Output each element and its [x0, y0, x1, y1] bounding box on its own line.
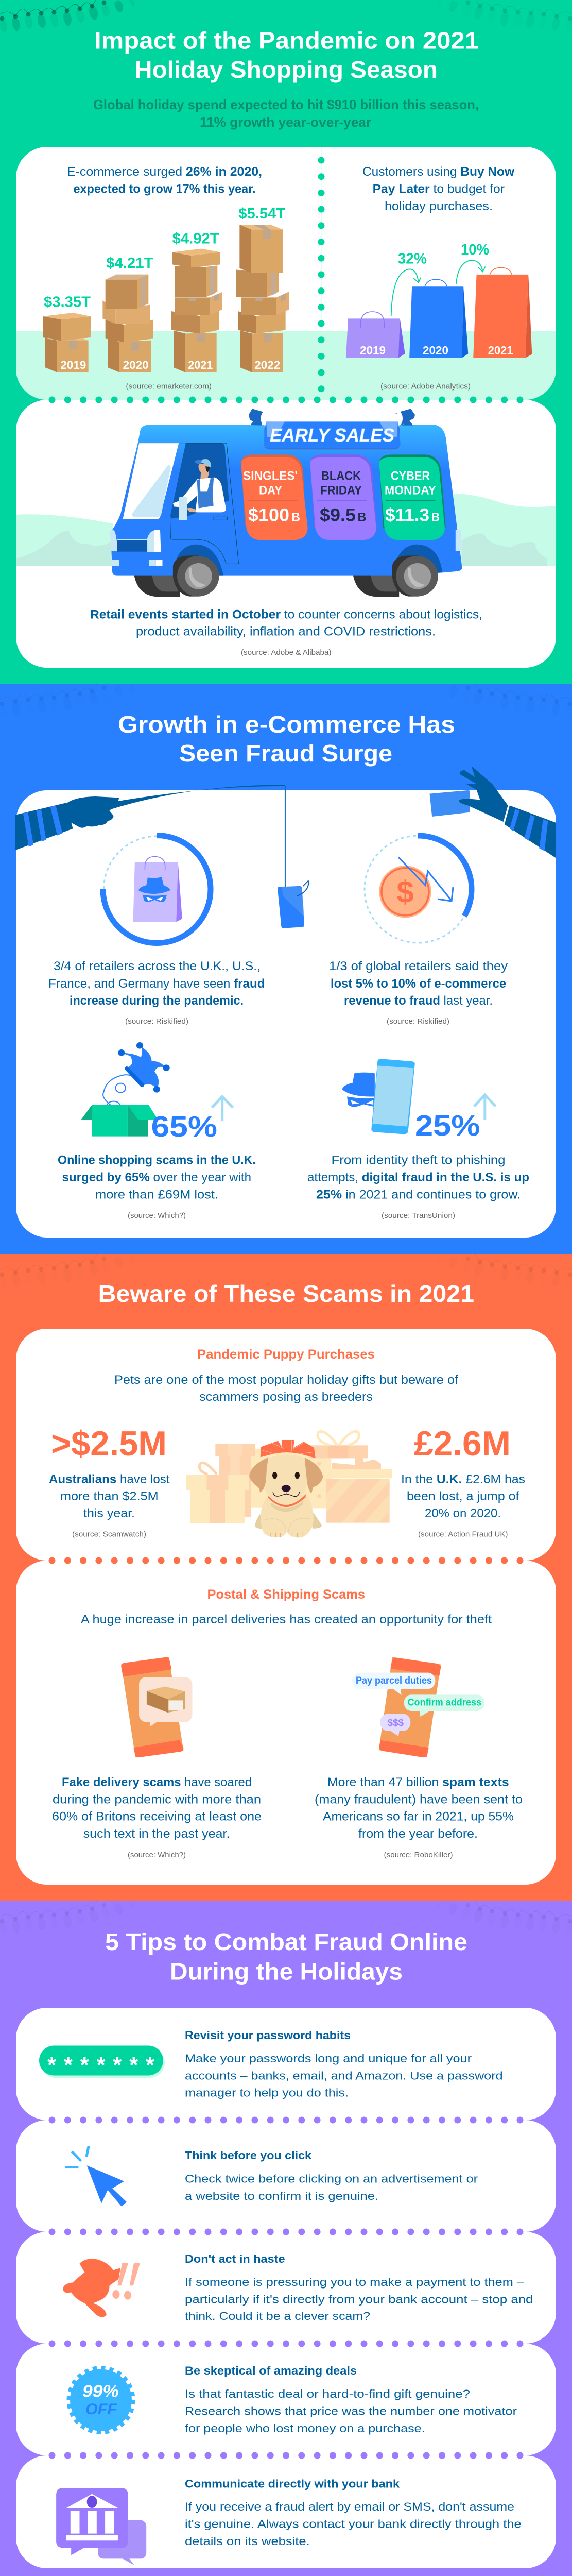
icon: running figure with exclamation marks [63, 2259, 140, 2317]
section background: blue [0, 684, 572, 1254]
text: buy now pay later: Customers using Buy Now [362, 165, 514, 179]
text: australians: Australians have lost [49, 1472, 170, 1486]
text: one third of retailers: revenue to fraud last year. [344, 994, 493, 1008]
text: uk: In the U.K. £2.6M has [401, 1472, 525, 1486]
tip text: think. Could it be a clever scam? [185, 2310, 370, 2323]
source: which: (source: Which?) [128, 1211, 186, 1220]
panel: fraud surge [15, 766, 556, 1238]
front wheel [173, 555, 219, 597]
heading: five tips: During the Holidays [170, 1958, 403, 1985]
values: box stack labels [44, 206, 286, 371]
icon: cursor [65, 2146, 127, 2207]
chart: stacked boxes per year [43, 225, 289, 372]
tip text: a website to confirm it is genuine. [185, 2190, 378, 2202]
tip text: Think before you click [185, 2149, 312, 2162]
subtitle: global holiday spend [93, 97, 479, 130]
text: online shopping scams: surged by 65% over the year with [62, 1171, 251, 1184]
value: 25 percent: 25% [415, 1109, 480, 1142]
value: uk loss: £2.6M [414, 1424, 511, 1463]
panel: tip 4 amazing deals [16, 2344, 556, 2455]
text: spam bubbles: $$$ [387, 1718, 404, 1728]
text: e-commerce surged: E-commerce surged 26% in 2020, [67, 165, 262, 179]
text: one third of retailers: 1/3 of global retailers said they [329, 959, 508, 973]
values: bag labels: 10% [461, 242, 489, 258]
source: riskified: (source: Riskified) [125, 1017, 188, 1026]
source: transunion: (source: TransUnion) [382, 1211, 455, 1220]
text: van sign and prices: $11.3 [385, 505, 429, 526]
panel: pandemic puppy purchases [16, 1329, 556, 1561]
section background: green [0, 0, 572, 684]
source: robokiller: (source: RoboKiller) [384, 1851, 453, 1859]
tip text: Be skeptical of amazing deals [185, 2364, 357, 2377]
2020 boxes [102, 275, 153, 372]
text: three quarters of retailers [48, 959, 265, 1008]
icon: falling coin [379, 857, 453, 918]
text: australians [49, 1472, 170, 1520]
tip text: for people who lost money on a purchase. [185, 2422, 425, 2435]
panel: tip 5 communicate with bank [16, 2455, 556, 2568]
text: van sign and prices: FRIDAY [320, 483, 362, 497]
phishing phone [278, 880, 308, 928]
source: emarketer: (source: emarketer.com) [126, 382, 212, 391]
text: uk [401, 1472, 525, 1520]
text: van sign and prices: B [357, 511, 367, 524]
icon: bank speech bubbles [56, 2488, 146, 2565]
text: van sign and prices: MONDAY [385, 483, 436, 497]
values: box stack labels: $3.35T [44, 294, 91, 311]
text: spam texts: Americans so far in 2021, up 55% [323, 1810, 514, 1824]
text: retail events: product availability, inflation and COVID restrictions. [136, 625, 436, 639]
text: van sign and prices [243, 425, 440, 526]
heading: growth in e-commerce [118, 711, 455, 767]
source: which: (source: Which?) [128, 1851, 186, 1859]
source: riskified: (source: Riskified) [387, 1017, 449, 1026]
values: box stack labels: $4.92T [172, 230, 219, 247]
text: australians: more than $2.5M [60, 1489, 159, 1503]
tip text [185, 2149, 478, 2202]
values: box stack labels: 2022 [254, 359, 280, 371]
tip text: Check twice before clicking on an advertisement or [185, 2172, 478, 2185]
panel: tip 3 do not act in haste [16, 2232, 556, 2344]
values: bag labels: 32% [397, 250, 427, 267]
2022 boxes [236, 225, 289, 372]
heading: five tips [105, 1928, 467, 1985]
tip text: If you receive a fraud alert by email or SMS, don't assume [185, 2500, 514, 2513]
values: box stack labels: 2020 [123, 359, 149, 371]
subtitle: global holiday spend: Global holiday spend expected to hit $910 billion this season, [93, 97, 479, 112]
icon: delivery van [110, 409, 462, 597]
rear wheel [392, 555, 438, 597]
text: van sign and prices: $9.5 [320, 505, 356, 526]
icon: phone with parcel [121, 1657, 192, 1757]
values: bag labels: 2020 [423, 344, 448, 357]
text: spam texts: More than 47 billion spam texts [327, 1775, 509, 1789]
tip text: details on its website. [185, 2535, 310, 2548]
text: buy now pay later: Pay Later to budget for [373, 182, 505, 196]
tip text: Make your passwords long and unique for all your [185, 2052, 472, 2065]
tip text: Research shows that price was the number one motivator [185, 2405, 517, 2418]
text: uk: 20% on 2020. [425, 1506, 501, 1520]
text: digital fraud: From identity theft to phishing [332, 1153, 506, 1167]
icon: jester hat jumping from box [81, 1042, 233, 1137]
panel: e-commerce and buy now pay later [16, 147, 556, 400]
tip text: manager to help you do this. [185, 2087, 349, 2099]
tip text: it's genuine. Always contact your bank directly through the [185, 2517, 522, 2531]
icon: password pill: ******* [47, 2053, 155, 2078]
heading: growth in e-commerce: Seen Fraud Surge [179, 740, 392, 767]
text: buy now pay later [362, 165, 514, 213]
text: van sign and prices: EARLY SALES [270, 425, 394, 446]
tip text: Communicate directly with your bank [185, 2478, 400, 2490]
icon: discount badge [68, 2368, 133, 2433]
icon: string lights right, orange section [437, 1253, 572, 1288]
text: pets intro: scammers posing as breeders [199, 1390, 373, 1404]
text: buy now pay later: holiday purchases. [385, 199, 493, 213]
tip text: Don't act in haste [185, 2252, 285, 2265]
value: australia loss: >$2.5M [51, 1424, 167, 1463]
text: e-commerce surged: expected to grow 17% this year. [73, 182, 255, 196]
icon: discount badge: 99% [82, 2382, 119, 2401]
text: fake delivery: 60% of Britons receiving at least one [52, 1810, 262, 1824]
text: online shopping scams [58, 1153, 256, 1201]
puppy [249, 1440, 323, 1537]
text: spam bubbles: Pay parcel duties [356, 1675, 432, 1686]
text: parcel intro: A huge increase in parcel deliveries has created an opportunity for theft [81, 1613, 492, 1626]
text: retail events [90, 608, 482, 639]
text: pets intro: Pets are one of the most popular holiday gifts but beware of [114, 1373, 458, 1387]
panel: early sales van [16, 400, 556, 668]
text: spam texts: from the year before. [358, 1827, 478, 1841]
values: box stack labels: $4.21T [106, 255, 153, 272]
icon: string lights right, purple section [437, 1900, 572, 1935]
text: van sign and prices: BLACK [321, 469, 361, 483]
icon: password pill [39, 2045, 165, 2078]
text: one third of retailers: lost 5% to 10% of e-commerce [331, 977, 506, 991]
title: impact of the pandemic [94, 27, 479, 83]
text: digital fraud: attempts, digital fraud in the U.S. is up [307, 1171, 529, 1184]
text: fake delivery: during the pandemic with more than [53, 1793, 261, 1806]
text: spam texts: (many fraudulent) have been sent to [315, 1793, 523, 1806]
illustration: puppy and gifts [186, 1431, 392, 1537]
text: three quarters of retailers: increase during the pandemic. [70, 994, 244, 1008]
price tag: cyber monday [379, 454, 446, 540]
tip text: If someone is pressuring you to make a payment to them – [185, 2276, 525, 2289]
text: three quarters of retailers: France, and Germany have seen fraud [48, 977, 265, 991]
text: online shopping scams: Online shopping scams in the U.K. [58, 1153, 256, 1167]
value: 65 percent: 65% [151, 1110, 217, 1143]
text: van sign and prices: DAY [259, 483, 282, 497]
section background: orange [0, 1254, 572, 1901]
icon: string lights left, blue section [0, 683, 135, 717]
chart: three quarters ring [103, 836, 211, 943]
text: uk: been lost, a jump of [407, 1489, 519, 1503]
hills background [16, 494, 556, 566]
price tag: singles day [241, 454, 308, 540]
values: box stack labels: $5.54T [238, 206, 286, 222]
subheading: puppy: Pandemic Puppy Purchases [197, 1347, 375, 1362]
panel: tip 2 think before you click [16, 2120, 556, 2232]
tip text: Is that fantastic deal or hard-to-find gift genuine? [185, 2387, 470, 2400]
2021 boxes [171, 249, 222, 372]
text: spam bubbles: Confirm address [408, 1698, 481, 1708]
illustration: arms with rod and card [15, 766, 556, 928]
right arm and card [429, 766, 556, 858]
title: impact of the pandemic: Impact of the Pandemic on 2021 [94, 27, 479, 54]
text: digital fraud [307, 1153, 529, 1201]
subtitle: global holiday spend: 11% growth year-over-year [200, 114, 371, 130]
icon: discount badge: OFF [85, 2401, 117, 2418]
text: fake delivery: such text in the past year. [83, 1827, 230, 1841]
values: box stack labels: 2021 [188, 359, 213, 371]
text: van sign and prices: B [291, 511, 300, 524]
icon: falling coin: $ [396, 875, 414, 909]
source: action fraud: (source: Action Fraud UK) [418, 1530, 508, 1538]
text: van sign and prices: $100 [248, 505, 289, 526]
text: online shopping scams: more than £69M lost. [95, 1188, 218, 1201]
text: van sign and prices: B [431, 511, 440, 524]
text: van sign and prices: CYBER [391, 469, 430, 483]
subheading: postal: Postal & Shipping Scams [207, 1587, 365, 1602]
icon: string lights left, purple section [0, 1900, 135, 1935]
text: fake delivery: Fake delivery scams have soared [62, 1775, 252, 1789]
heading: beware of scams: Beware of These Scams in 2021 [98, 1280, 474, 1307]
source: adobe and alibaba: (source: Adobe & Alibaba) [241, 648, 332, 657]
text: one third of retailers [329, 959, 508, 1008]
left arm [15, 785, 285, 850]
tip text [185, 2364, 517, 2435]
icon: string lights right, blue section [437, 683, 572, 717]
values: bag labels [360, 242, 513, 357]
tip text [185, 2029, 503, 2099]
section background: purple [0, 1901, 572, 2576]
2019 boxes [43, 313, 91, 372]
heading: growth in e-commerce: Growth in e-Commerce Has [118, 711, 455, 738]
icon: string lights left, green section [0, 0, 135, 32]
icon: spy behind phone [342, 1059, 496, 1134]
text: fake delivery [52, 1775, 262, 1841]
text: australians: this year. [83, 1506, 135, 1520]
chart: one third ring [365, 836, 472, 943]
text: three quarters of retailers: 3/4 of retailers across the U.K., U.S., [54, 959, 261, 973]
text: spam texts [315, 1775, 523, 1841]
chart: shopping bags [346, 260, 532, 358]
values: box stack labels: 2019 [60, 359, 86, 371]
spotlights [249, 409, 415, 426]
gifts [186, 1431, 392, 1523]
driver [173, 459, 226, 520]
icon: string lights left, orange section [0, 1253, 135, 1288]
tip text: accounts – banks, email, and Amazon. Use a password [185, 2069, 503, 2082]
tip text [185, 2252, 533, 2323]
text: digital fraud: 25% in 2021 and continues to grow. [316, 1188, 521, 1201]
tip text: Revisit your password habits [185, 2029, 351, 2042]
panel: postal and shipping scams [16, 1561, 556, 1885]
values: bag labels: 2019 [360, 344, 386, 357]
text: spam bubbles [356, 1675, 481, 1728]
source: adobe analytics: (source: Adobe Analytics) [380, 382, 471, 391]
icon: phone with spam texts [352, 1657, 484, 1757]
icon: bag with spy [133, 857, 182, 922]
tip text [185, 2478, 522, 2548]
panel: tip 1 password habits [16, 2008, 556, 2120]
text: retail events: Retail events started in October to counter concerns about logistics, [90, 608, 482, 622]
source: scamwatch: (source: Scamwatch) [72, 1530, 146, 1538]
text: e-commerce surged [67, 165, 262, 196]
heading: five tips: 5 Tips to Combat Fraud Online [105, 1928, 467, 1955]
values: bag labels: 2021 [488, 344, 513, 357]
text: pets intro [114, 1373, 458, 1404]
price tag: black friday [310, 454, 377, 540]
title: impact of the pandemic: Holiday Shopping Season [134, 56, 438, 83]
tip text: particularly if it's directly from your bank account – stop and [185, 2293, 533, 2306]
sign board [264, 421, 401, 449]
text: van sign and prices: SINGLES' [243, 469, 298, 483]
icon: string lights right, green section [437, 0, 572, 32]
